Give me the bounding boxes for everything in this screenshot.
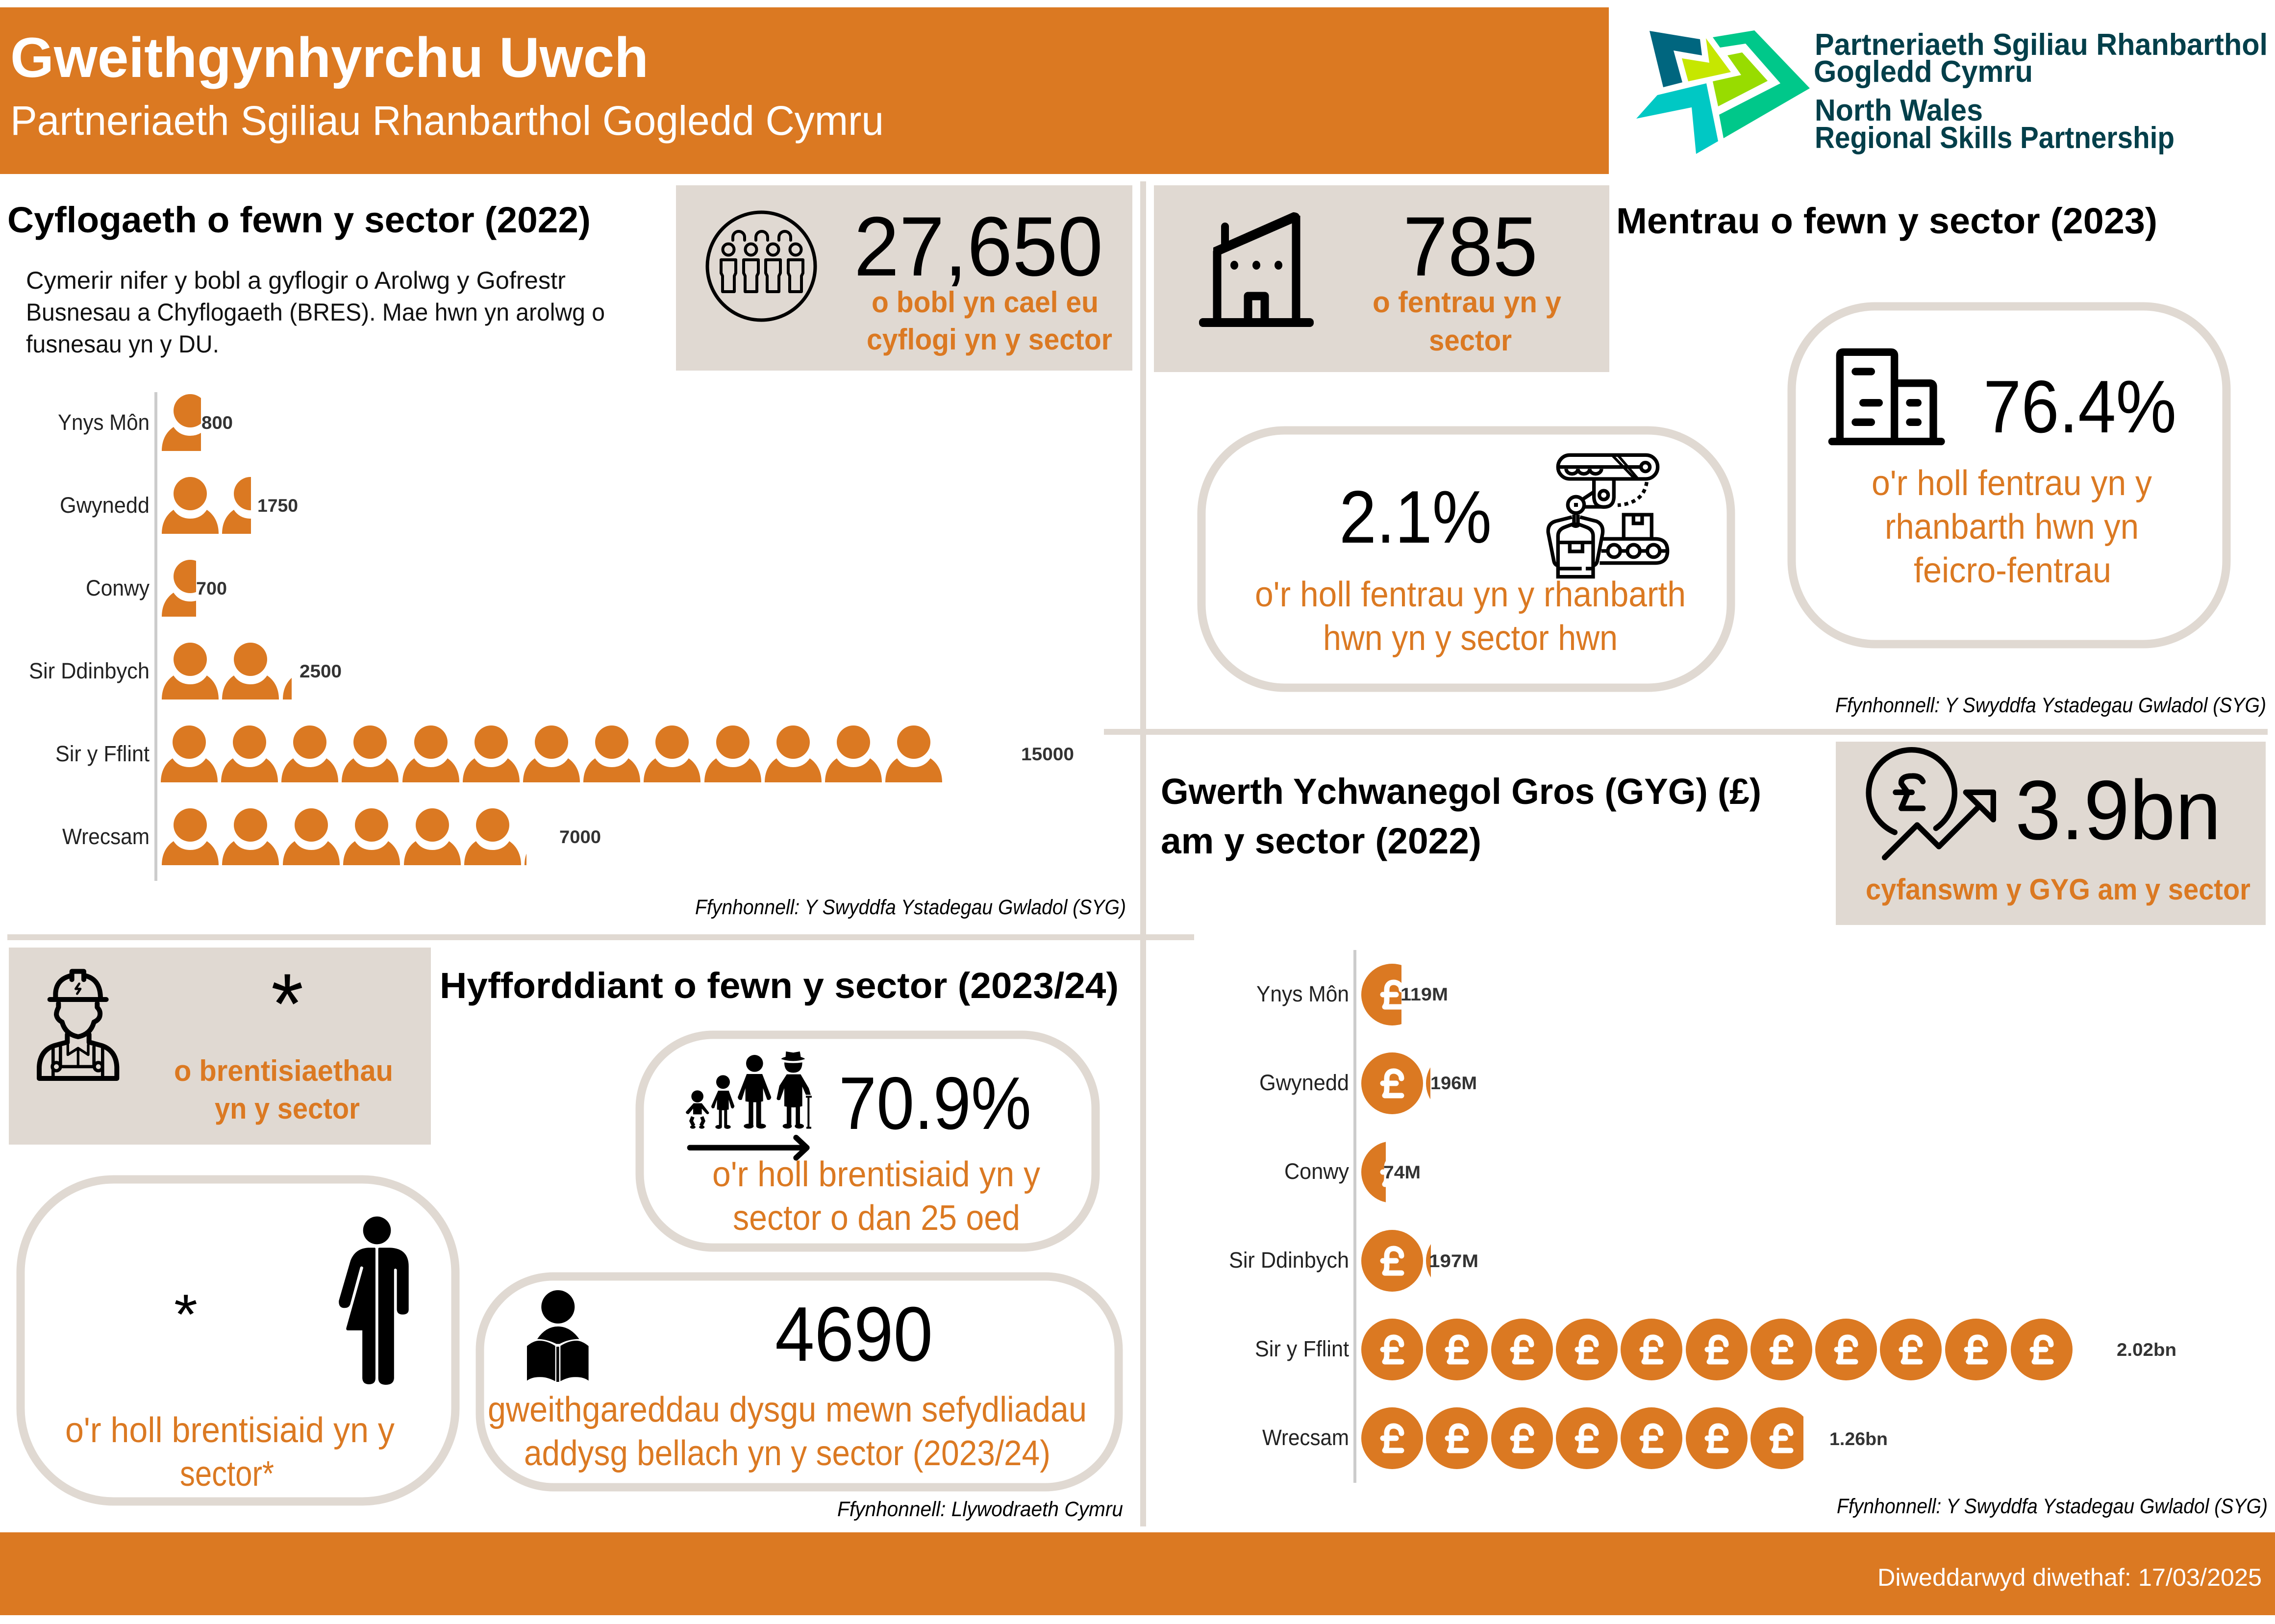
row labels: Gwynedd (1259, 1070, 1349, 1095)
coins row: Ynys Môn (1361, 964, 1401, 1025)
icon: ages with arrow (686, 1051, 812, 1158)
caption: sector* (180, 1454, 274, 1494)
panel: employment total (676, 185, 1132, 371)
caption (1255, 575, 1686, 658)
icons row: Ynys Môn (162, 394, 201, 451)
row labels (29, 410, 150, 849)
icon: group of people (707, 212, 815, 320)
coins row: Wrecsam (1361, 1407, 1812, 1469)
row labels: Wrecsam (1262, 1425, 1349, 1450)
row labels: Wrecsam (62, 824, 150, 849)
source: employment: Ffynhonnell: Y Swyddfa Ystadegau Gwladol (SYG) (695, 896, 1126, 919)
row labels (1229, 981, 1349, 1450)
text block: employment description: Busnesau a Chyflogaeth (BRES). Mae hwn yn arolwg o (26, 299, 605, 326)
row labels: Sir y Fflint (55, 741, 150, 766)
caption (712, 1155, 1040, 1238)
heading: GVA (1161, 771, 1761, 861)
value labels: 119M (1400, 984, 1448, 1004)
header banner (0, 7, 1609, 174)
text block: employment description: Cymerir nifer y bobl a gyflogir o Arolwg y Gofrestr (26, 267, 566, 294)
value labels: 7000 (559, 827, 601, 847)
logo: Partneriaeth Sgiliau Rhanbarthol (1815, 28, 2268, 62)
number: 2.1% (1339, 475, 1492, 559)
value labels: 2500 (300, 661, 342, 681)
caption: feicro-fentrau (1914, 551, 2111, 590)
number: 785 (1403, 200, 1538, 294)
row labels: Ynys Môn (1256, 981, 1349, 1006)
panel: employment heading: Cyflogaeth o fewn y sector (2022) (7, 200, 591, 240)
suppressed value asterisk: * (271, 956, 303, 1052)
number: 4690 (775, 1291, 933, 1377)
row labels: Sir Ddinbych (29, 658, 150, 683)
number: 70.9% (839, 1062, 1031, 1145)
bar chart: employment by area (29, 392, 1074, 881)
icon: factory robot arm (1548, 455, 1668, 577)
panel: micro enterprises (1792, 306, 2226, 644)
caption: cyfanswm y GYG am y sector (1866, 873, 2250, 906)
caption (867, 286, 1112, 356)
icon: factory building (1199, 212, 1314, 327)
caption (65, 1411, 395, 1494)
row labels: Gwynedd (60, 493, 150, 518)
row labels: Sir Ddinbych (1229, 1248, 1349, 1273)
icons row: Wrecsam (162, 808, 526, 865)
icons row: Sir Ddinbych (162, 643, 292, 700)
value labels (1383, 984, 2176, 1449)
heading: GVA: am y sector (2022) (1161, 821, 1481, 861)
caption: o'r holl brentisiaid yn y (65, 1411, 395, 1450)
panel: sector share of enterprises (1201, 430, 1731, 688)
number: 27,650 (854, 200, 1103, 294)
caption: cyflogi yn y sector (867, 323, 1112, 356)
row labels: Conwy (1284, 1159, 1349, 1184)
caption: hwn yn y sector hwn (1323, 619, 1618, 658)
value labels: 1.26bn (1829, 1429, 1888, 1449)
logo: Regional Skills Partnership (1815, 121, 2175, 155)
source: training: Ffynhonnell: Llywodraeth Cymru (837, 1498, 1123, 1521)
panel: apprentices under 25 (640, 1035, 1096, 1248)
logo (1636, 28, 2268, 155)
caption (1872, 464, 2152, 590)
caption (488, 1390, 1087, 1473)
row labels: Sir y Fflint (1255, 1336, 1349, 1361)
icon: gender figure (339, 1217, 409, 1385)
value labels: 1750 (257, 496, 298, 516)
heading: training: Hyfforddiant o fewn y sector (2023/24) (440, 965, 1119, 1006)
caption: o brentisiaethau (174, 1054, 393, 1087)
caption: o fentrau yn y (1373, 286, 1562, 319)
caption (1373, 286, 1562, 357)
caption: o bobl yn cael eu (872, 286, 1099, 319)
icons row: Sir y Fflint (161, 725, 942, 782)
caption: yn y sector (215, 1092, 360, 1125)
coins row: Sir Ddinbych (1361, 1230, 1431, 1292)
coins row: Sir y Fflint (1361, 1319, 2073, 1380)
text block: employment description: fusnesau yn y DU. (26, 330, 219, 358)
footer (0, 1532, 2275, 1615)
logo: Gogledd Cymru (1814, 55, 2033, 89)
last updated date: Diweddarwyd diwethaf: 17/03/2025 (1877, 1564, 2262, 1591)
panel: further education learning activities (480, 1276, 1119, 1487)
caption: o'r holl fentrau yn y rhanbarth (1255, 575, 1686, 614)
icons row: Conwy (162, 560, 196, 617)
caption: sector o dan 25 oed (733, 1199, 1020, 1238)
value labels: 196M (1430, 1073, 1477, 1093)
caption: addysg bellach yn y sector (2023/24) (524, 1434, 1050, 1473)
bar chart: GVA by area (1229, 950, 2176, 1483)
panel: enterprises total (1154, 185, 1609, 372)
caption: o'r holl brentisiaid yn y (712, 1155, 1040, 1194)
icon: worker with hard hat (39, 972, 117, 1078)
coins row: Gwynedd (1361, 1052, 1430, 1114)
panel: apprenticeships total (9, 948, 431, 1145)
panel: GVA total (1836, 742, 2266, 925)
heading: GVA: Gwerth Ychwanegol Gros (GYG) (£) (1161, 771, 1761, 812)
number: 76.4% (1983, 365, 2176, 449)
value labels (196, 413, 1074, 847)
icon: pound growth (1869, 750, 1993, 857)
heading: enterprises: Mentrau o fewn y sector (2023) (1616, 200, 2157, 241)
value labels: 15000 (1021, 744, 1074, 764)
text block: employment description (26, 267, 605, 358)
caption: rhanbarth hwn yn (1885, 507, 2139, 547)
value labels: 197M (1429, 1251, 1478, 1271)
value labels: 2.02bn (2117, 1340, 2176, 1360)
caption (174, 1054, 393, 1125)
value labels: 800 (201, 413, 233, 433)
panel: apprentices by gender (21, 1179, 455, 1501)
caption: o'r holl fentrau yn y (1872, 464, 2152, 503)
caption: gweithgareddau dysgu mewn sefydliadau (488, 1390, 1087, 1429)
logo: North Wales (1815, 94, 1983, 127)
value labels: 700 (196, 578, 227, 599)
icon: person reading (527, 1290, 589, 1382)
value labels: 74M (1383, 1162, 1421, 1182)
number: 3.9bn (2015, 763, 2221, 857)
row labels: Ynys Môn (58, 410, 150, 435)
icon: office buildings (1832, 352, 1941, 442)
row labels: Conwy (86, 575, 150, 600)
icons row: Gwynedd (162, 477, 251, 534)
title: Gweithgynhyrchu Uwch (10, 26, 649, 89)
caption: sector (1429, 324, 1512, 357)
suppressed value asterisk: * (174, 1283, 198, 1346)
coins row: Conwy (1361, 1142, 1386, 1202)
subtitle: Partneriaeth Sgiliau Rhanbarthol Gogledd Cymru (10, 98, 884, 144)
